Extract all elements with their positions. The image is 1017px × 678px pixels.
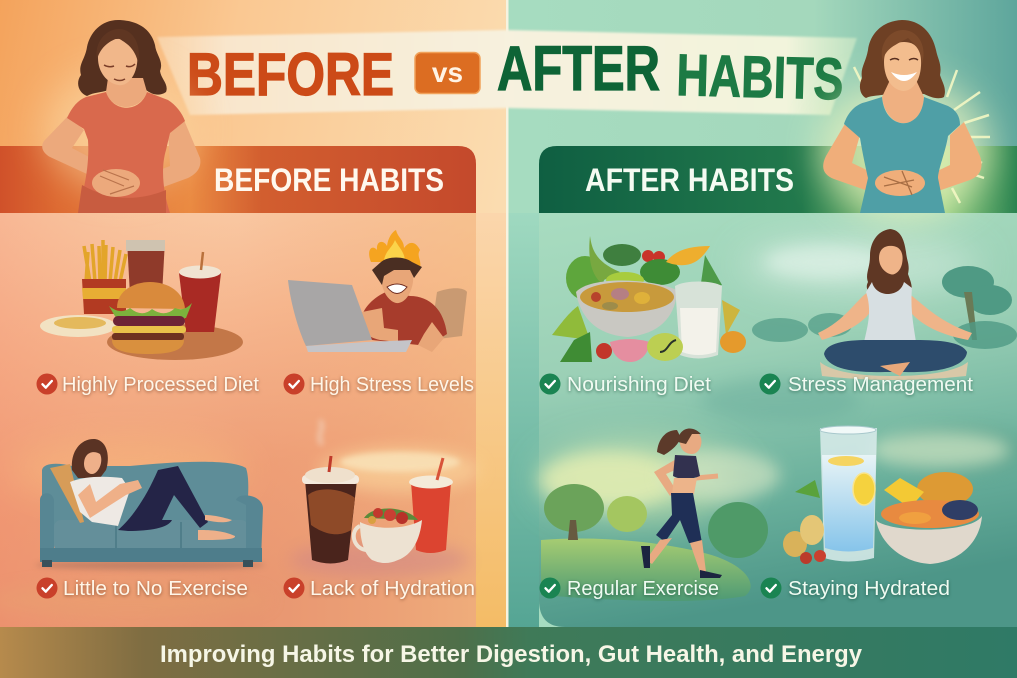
arm bbox=[78, 480, 142, 518]
clouds bbox=[870, 432, 1010, 468]
red cup bbox=[179, 273, 221, 332]
burger bbox=[117, 282, 185, 309]
hair bbox=[78, 20, 167, 96]
footer bar bbox=[0, 627, 1017, 678]
cushion bbox=[820, 362, 968, 380]
heading: before habits: BEFORE HABITS bbox=[214, 162, 444, 198]
fries box bbox=[82, 279, 126, 314]
white top bbox=[70, 477, 130, 526]
lemons bbox=[884, 478, 924, 508]
hands bbox=[875, 170, 925, 196]
lemon slice bbox=[853, 473, 875, 505]
hands bbox=[92, 169, 140, 197]
neck and chest bbox=[106, 78, 147, 107]
laptop bbox=[288, 280, 372, 346]
lower items bbox=[560, 332, 592, 362]
leaf bbox=[795, 480, 820, 498]
title word: after: AFTER bbox=[497, 34, 660, 104]
right background bbox=[507, 0, 1017, 678]
leafy vegetables bbox=[552, 236, 740, 340]
shoes bbox=[641, 546, 722, 578]
bowl bbox=[360, 520, 422, 563]
left fruit bbox=[783, 531, 807, 557]
head bbox=[381, 264, 413, 303]
clouds bbox=[765, 246, 885, 278]
shirt bbox=[360, 292, 447, 346]
chair bbox=[430, 288, 467, 340]
tray bbox=[107, 324, 243, 360]
illustration: before woman bbox=[42, 20, 200, 213]
illustration: meditating woman bbox=[752, 229, 1017, 380]
milk glass bbox=[675, 282, 722, 358]
fringe bbox=[96, 29, 139, 62]
label: regular exercise: Regular Exercise bbox=[567, 578, 719, 600]
soda glass bbox=[127, 240, 165, 295]
sofa bbox=[42, 462, 248, 530]
label: highly processed diet: Highly Processed Diet bbox=[62, 374, 259, 396]
before header band bbox=[0, 146, 476, 213]
illustration: sugary drinks bbox=[302, 420, 460, 564]
title word: before: BEFORE bbox=[187, 41, 394, 108]
mango bbox=[917, 472, 973, 506]
tank top bbox=[864, 282, 916, 342]
flames bbox=[369, 230, 420, 268]
hair bbox=[860, 20, 945, 98]
woman head bbox=[72, 439, 108, 478]
heading: after habits: AFTER HABITS bbox=[585, 162, 794, 198]
glass bbox=[820, 428, 877, 562]
label: nourishing diet: Nourishing Diet bbox=[567, 374, 711, 396]
label: high stress levels: High Stress Levels bbox=[310, 374, 474, 396]
centre divider bbox=[506, 0, 508, 627]
hair bbox=[372, 258, 422, 285]
right side strip bbox=[508, 213, 539, 627]
sun rays bbox=[854, 67, 990, 203]
leggings bbox=[656, 493, 702, 543]
feet bbox=[880, 362, 910, 376]
illustration: after woman bbox=[820, 20, 990, 220]
pants bbox=[118, 466, 208, 531]
feet bbox=[198, 515, 235, 540]
calves bbox=[646, 538, 706, 572]
face bbox=[884, 42, 921, 91]
neck and chest bbox=[882, 80, 924, 123]
fries bbox=[84, 240, 126, 282]
face bbox=[98, 39, 137, 85]
red cup bbox=[411, 482, 451, 553]
title bbox=[187, 34, 844, 112]
arms bbox=[654, 458, 684, 496]
hair bbox=[867, 229, 912, 294]
head bbox=[680, 430, 701, 454]
facial features bbox=[104, 64, 135, 80]
mouth bbox=[387, 284, 407, 294]
badge: vs bbox=[415, 52, 480, 94]
panel: before habits bbox=[0, 213, 480, 627]
label: staying hydrated: Staying Hydrated bbox=[788, 578, 950, 600]
steam bbox=[320, 420, 322, 445]
fringe bbox=[882, 30, 924, 64]
illustration: runner in park bbox=[540, 428, 780, 601]
clouds bbox=[340, 452, 460, 472]
crossed legs bbox=[824, 340, 967, 372]
crop top bbox=[673, 455, 700, 479]
berries bbox=[364, 508, 418, 524]
label: stress management: Stress Management bbox=[788, 374, 973, 396]
smile bbox=[891, 72, 917, 81]
eyes bbox=[890, 58, 918, 60]
label: lack of hydration: Lack of Hydration bbox=[310, 578, 475, 600]
shirt bbox=[844, 97, 960, 213]
arms bbox=[823, 122, 982, 198]
tree bbox=[544, 484, 768, 558]
bowl of fruit bbox=[881, 500, 979, 528]
trees bbox=[752, 266, 1017, 349]
badge: vs: vs bbox=[432, 57, 463, 88]
illustration: woman on sofa bbox=[35, 439, 265, 570]
arms bbox=[361, 308, 444, 352]
face bbox=[879, 246, 903, 275]
arms bbox=[818, 292, 972, 340]
shirt bbox=[67, 92, 185, 213]
illustration: water and fruit bbox=[783, 426, 1010, 564]
footer text: Improving Habits for Better Digestion, Gut Health, and Energy bbox=[160, 641, 863, 668]
title word: habits: HABITS bbox=[676, 42, 844, 112]
arms bbox=[42, 116, 200, 200]
left side strip bbox=[476, 213, 506, 627]
title banner bbox=[157, 30, 857, 115]
illustration: fast food bbox=[40, 240, 243, 360]
midriff bbox=[672, 478, 697, 494]
after header band bbox=[539, 146, 1017, 213]
ponytail bbox=[657, 430, 680, 455]
cold drink cup bbox=[305, 480, 357, 564]
illustration: healthy food bbox=[552, 236, 746, 362]
illustration: stressed man at laptop bbox=[288, 230, 467, 352]
label: little to no exercise: Little to No Exercise bbox=[63, 578, 248, 600]
left background bbox=[0, 0, 507, 678]
bowl bbox=[576, 280, 677, 337]
hill bbox=[541, 538, 751, 601]
panel: after habits bbox=[539, 213, 1017, 627]
side plate bbox=[40, 315, 116, 337]
pillow bbox=[50, 464, 84, 523]
